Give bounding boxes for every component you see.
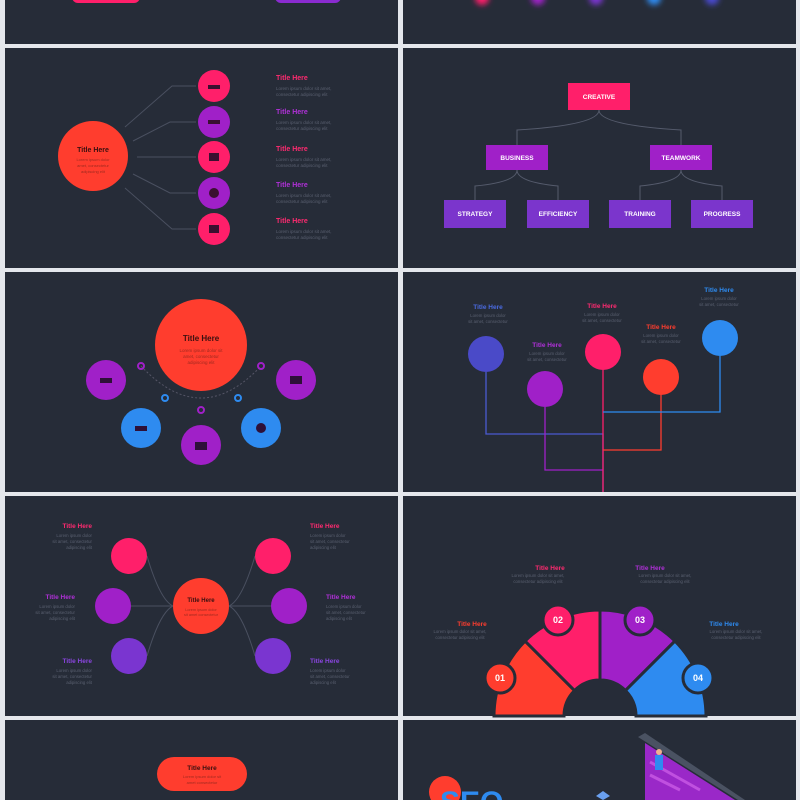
panel: semicircle fan: 03: [635, 615, 645, 625]
panel: center with six items: adipiscing elit: [326, 616, 353, 621]
center circle: sit amet consectetur: [184, 613, 219, 617]
panel: center with six items: Lorem ipsum dolor: [39, 604, 76, 609]
item texts: Title Here: [276, 75, 308, 82]
item texts: consectetur adipiscing elit: [276, 163, 328, 168]
panel: center with six items: Lorem ipsum dolor: [326, 604, 362, 609]
panel: center with six items: sit amet, consectetur: [52, 674, 93, 679]
panel: semicircle fan: Title Here: [709, 621, 739, 628]
panel: tree with lines: Lorem ipsum dolor: [701, 296, 737, 301]
panel: center with six items: sit amet, consectetur: [35, 610, 76, 615]
panel: semicircle fan: Title Here: [535, 565, 565, 572]
panel: center with six items: Title Here: [62, 523, 92, 530]
panel: semicircle fan: [403, 496, 796, 716]
panel: tree with lines: Title Here: [587, 303, 617, 310]
panel: center with six items: sit amet, consectetur: [310, 539, 350, 544]
big circle: amet, consectetur: [77, 163, 110, 168]
panel: center with six items: adipiscing elit: [310, 680, 337, 685]
panel: org chart: CREATIVE: [583, 94, 616, 101]
panel: tree with lines: Lorem ipsum dolor: [584, 312, 620, 317]
panel: top-right partial slide: [403, 0, 796, 44]
panel: center with six items: adipiscing elit: [310, 545, 337, 550]
panel: circle with orbit items: [5, 272, 398, 492]
item texts: [276, 75, 332, 240]
panel: semicircle fan: 02: [553, 615, 563, 625]
item texts: consectetur adipiscing elit: [276, 92, 328, 97]
panel: semicircle fan: Lorem ipsum dolor sit amet,: [511, 573, 565, 578]
big circle: Title Here: [77, 147, 109, 154]
panel: center with six items: Lorem ipsum dolor: [310, 533, 346, 538]
panel: tree with lines: Title Here: [473, 304, 503, 311]
laptop: [638, 733, 745, 800]
panel: tree with lines: Title Here: [704, 287, 734, 294]
item circles: [198, 70, 230, 245]
big circle: adipiscing elit: [187, 360, 215, 365]
panel: tree with lines: sit amet, consectetur: [527, 357, 567, 362]
panel: center with six items: [5, 496, 398, 716]
item texts: Lorem ipsum dolor sit amet,: [276, 193, 332, 198]
panel: center with six items: Title Here: [45, 594, 75, 601]
panel: center with six items: sit amet, consectetur: [326, 610, 366, 615]
panel: tree with lines: Lorem ipsum dolor: [470, 313, 506, 318]
panel: tree with lines: Title Here: [646, 324, 676, 331]
panel: tree with lines: sit amet, consectetur: [468, 319, 508, 324]
item texts: consectetur adipiscing elit: [276, 199, 328, 204]
pill: purple: [275, 0, 341, 3]
panel: top-left partial slide: [5, 0, 398, 44]
panel: tree with lines: [403, 272, 796, 492]
pill: title: Lorem ipsum dolor sit: [183, 774, 222, 779]
center circle: [173, 578, 229, 634]
big circle: Lorem ipsum dolor: [76, 157, 110, 162]
panel: org chart: BUSINESS: [500, 155, 534, 162]
item texts: Lorem ipsum dolor sit amet,: [276, 86, 332, 91]
panel: semicircle fan: Lorem ipsum dolor sit amet,: [709, 629, 763, 634]
panel: center with six items: Lorem ipsum dolor: [56, 533, 93, 538]
panel: semicircle fan: 01: [495, 673, 505, 683]
orbit circles: [86, 360, 316, 465]
panel: center with six items: sit amet, consectetur: [310, 674, 350, 679]
panel: tree with lines: sit amet, consectetur: [699, 302, 739, 307]
panel: org chart: EFFICIENCY: [539, 211, 578, 218]
panel: semicircle fan: consectetur adipiscing elit: [711, 635, 761, 640]
panel: tree with lines: sit amet, consectetur: [641, 339, 681, 344]
center circle: Title Here: [187, 598, 215, 604]
panel: org chart: TEAMWORK: [662, 155, 701, 162]
panel: center with six items: adipiscing elit: [66, 545, 93, 550]
item texts: Lorem ipsum dolor sit amet,: [276, 157, 332, 162]
big circle: [155, 299, 247, 391]
big circle: Title Here: [183, 334, 220, 343]
item texts: consectetur adipiscing elit: [276, 126, 328, 131]
panel: center with six items: Title Here: [62, 658, 92, 665]
panel: center with six items: adipiscing elit: [66, 680, 93, 685]
item texts: Title Here: [276, 182, 308, 189]
item texts: Title Here: [276, 146, 308, 153]
panel: bottom-right SEO illustration: [403, 720, 796, 800]
panel: center with six items: Title Here: [310, 523, 340, 530]
pill: title: [157, 757, 247, 791]
panel: semicircle fan: consectetur adipiscing elit: [435, 635, 485, 640]
pill: title: Title Here: [187, 765, 217, 772]
item texts: Lorem ipsum dolor sit amet,: [276, 229, 332, 234]
panel: center with six items: Title Here: [326, 594, 356, 601]
panel: center with six items: Title Here: [310, 658, 340, 665]
big circle: amet, consectetur: [183, 354, 219, 359]
panel: tree with lines: sit amet, consectetur: [582, 318, 622, 323]
item texts: Title Here: [276, 109, 308, 116]
center circle: Lorem ipsum dolor: [185, 608, 217, 612]
big circle: [58, 121, 128, 191]
big circle: adipiscing elit: [81, 169, 106, 174]
item texts: Title Here: [276, 218, 308, 225]
panel: org chart: PROGRESS: [704, 211, 741, 218]
panel: semicircle fan: Title Here: [635, 565, 665, 572]
panel: tree with lines: Lorem ipsum dolor: [529, 351, 565, 356]
panel: hub with five items: [5, 48, 398, 268]
panel: center with six items: Lorem ipsum dolor: [56, 668, 93, 673]
panel: center with six items: adipiscing elit: [49, 616, 76, 621]
panel: semicircle fan: Lorem ipsum dolor sit amet,: [638, 573, 692, 578]
item texts: Lorem ipsum dolor sit amet,: [276, 120, 332, 125]
panel: center with six items: Lorem ipsum dolor: [310, 668, 346, 673]
panel: org chart: STRATEGY: [458, 211, 493, 218]
panel: semicircle fan: Lorem ipsum dolor sit amet,: [433, 629, 487, 634]
pill: title: amet consectetur: [187, 780, 218, 785]
big circle: Lorem ipsum dolor sit: [179, 348, 223, 353]
panel: tree with lines: Lorem ipsum dolor: [643, 333, 679, 338]
panel: bottom-left partial slide: [5, 720, 398, 800]
panel: semicircle fan: consectetur adipiscing elit: [513, 579, 563, 584]
pill: pink: [72, 0, 140, 3]
panel: org chart: TRAINING: [624, 211, 656, 218]
panel: semicircle fan: 04: [693, 673, 703, 683]
item texts: consectetur adipiscing elit: [276, 235, 328, 240]
panel: tree with lines: Title Here: [532, 342, 562, 349]
panel: semicircle fan: Title Here: [457, 621, 487, 628]
panel: org chart: [403, 48, 796, 268]
panel: semicircle fan: consectetur adipiscing elit: [640, 579, 690, 584]
panel: center with six items: sit amet, consectetur: [52, 539, 93, 544]
